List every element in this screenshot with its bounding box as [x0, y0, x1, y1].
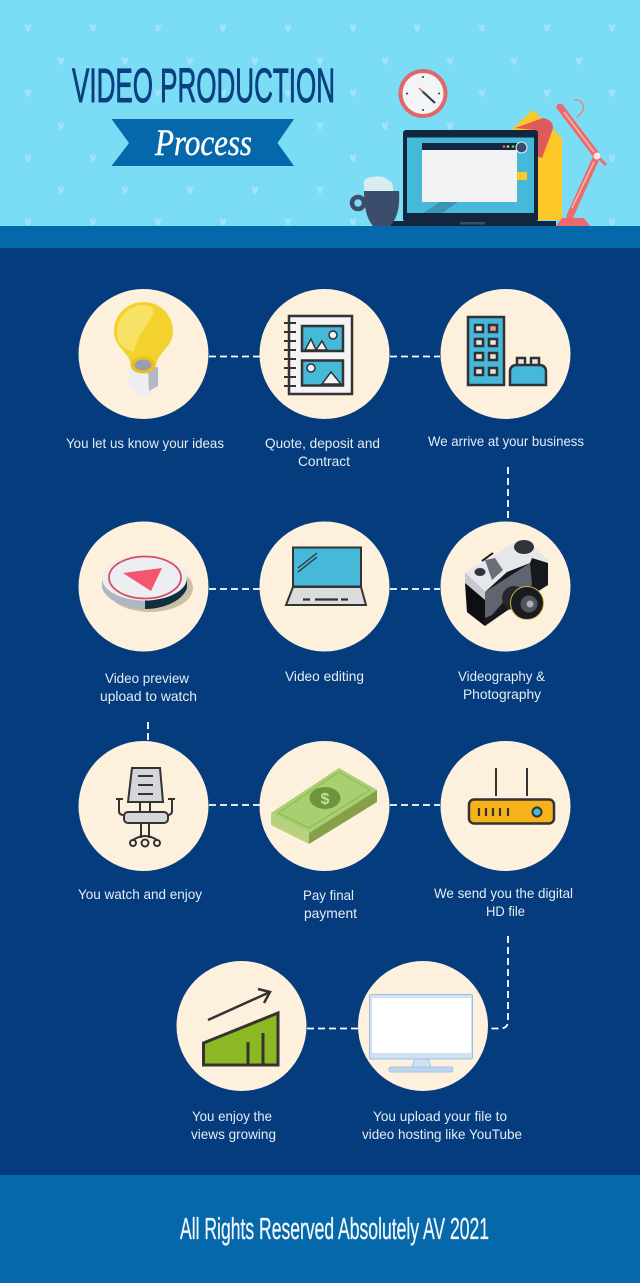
panel: navy process background	[0, 248, 640, 1175]
icon: stack of money	[271, 768, 377, 844]
icon: play button	[102, 556, 193, 612]
step 8: payment: payment	[304, 905, 357, 921]
step 10: views growing	[176, 961, 306, 1142]
icon: stack of money: $	[321, 791, 330, 808]
step 4: preview: upload to watch	[100, 688, 197, 704]
icon: growth chart	[204, 989, 278, 1065]
label: Video preview	[105, 670, 190, 686]
dashed connectors	[148, 356, 508, 1028]
icon: buildings	[468, 317, 546, 385]
icon: router	[469, 768, 554, 824]
step 4: preview	[78, 522, 208, 704]
icon: coffee mug	[352, 176, 399, 226]
label: Quote, deposit and	[265, 435, 380, 451]
panel: header	[0, 0, 640, 226]
label: You enjoy the	[192, 1108, 272, 1124]
label: You watch and enjoy	[78, 886, 202, 902]
icon: laptop	[388, 130, 556, 226]
label: We send you the digital	[434, 885, 573, 901]
step 6: videography	[440, 522, 570, 702]
step 9: send file	[434, 741, 573, 919]
icon: notebook	[284, 316, 352, 394]
step 6: videography: Photography	[463, 686, 541, 702]
step 7: watch	[78, 741, 208, 902]
icon: light bulb	[114, 302, 173, 395]
icon: wall clock	[398, 69, 448, 118]
label: Pay final	[303, 887, 354, 903]
step 10: views growing: views growing	[191, 1126, 276, 1142]
step 11: upload: video hosting like YouTube	[362, 1126, 522, 1142]
ribbon: Process: Process	[154, 123, 252, 164]
step 8: payment	[260, 741, 390, 921]
title: VIDEO PRODUCTION	[72, 60, 335, 113]
label: We arrive at your business	[428, 433, 584, 449]
label: Videography &	[458, 668, 546, 684]
step 2: quote: Contract	[298, 453, 350, 469]
panel: footer	[0, 1175, 640, 1283]
step 9: send file: HD file	[486, 903, 525, 919]
label: You upload your file to	[373, 1108, 507, 1124]
icon: laptop outline	[286, 548, 366, 605]
ribbon: Process	[112, 119, 294, 166]
step 5: editing	[260, 522, 390, 684]
panel: blue desk band	[0, 226, 640, 248]
icon: desk lamp	[513, 100, 606, 226]
step 2: quote	[260, 289, 390, 469]
step 11: upload	[358, 961, 522, 1142]
icon: camera	[465, 540, 548, 626]
step 1: ideas	[66, 289, 224, 451]
label: Video editing	[285, 668, 364, 684]
step 3: arrive	[428, 289, 584, 449]
label: You let us know your ideas	[66, 435, 224, 451]
icon: monitor	[370, 994, 472, 1072]
icon: office chair	[116, 768, 175, 846]
